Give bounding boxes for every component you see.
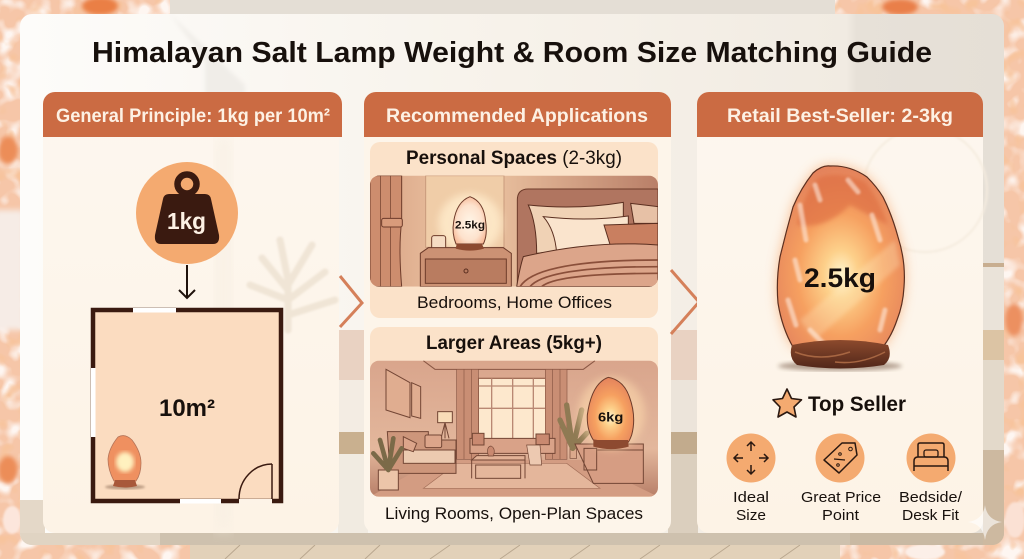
floor plan: 10 square metre room: [91, 308, 281, 504]
sofa and pillows: [339, 330, 364, 380]
icon: 1kg weight: 1kg: [167, 208, 206, 234]
feature: great price point: Point: [822, 507, 860, 524]
sparkle: [968, 505, 1002, 540]
title: Himalayan Salt Lamp Weight & Room Size Matching Guide: [92, 37, 932, 69]
caption: bedrooms, home offices: Bedrooms, Home Offices: [417, 293, 612, 312]
feature: bedside or desk fit: Desk Fit: [902, 507, 960, 524]
feature: ideal size: Size: [736, 507, 766, 524]
illustration: living room with lamp: 6kg: [598, 410, 623, 425]
illustration: bedroom with lamp: 2.5kg: [455, 220, 485, 232]
wood floor and rug: [339, 432, 364, 454]
label: 10m²: 10m²: [159, 395, 215, 422]
feature: ideal size: Ideal: [733, 489, 769, 506]
arrow: chevron to applications: [340, 276, 362, 327]
badge: top seller: [773, 389, 906, 417]
heading: personal spaces: Personal Spaces (2-3kg): [406, 148, 622, 169]
icon: 1kg weight: [136, 162, 238, 264]
arrow: weight to room: [179, 265, 195, 298]
header: retail best-seller: [697, 92, 983, 137]
label: 2.5kg: 2.5kg: [804, 263, 876, 293]
badge: top seller: Top Seller: [808, 393, 906, 416]
icon: small salt lamp: [105, 436, 145, 490]
illustration: bedroom with lamp: [370, 176, 658, 287]
panel: recommended applications: [364, 92, 671, 533]
feature: great price point: [801, 434, 881, 524]
header: general principle: [43, 92, 342, 137]
right side shelves: [983, 263, 1004, 267]
feature: great price point: Great Price: [801, 489, 881, 506]
header: retail best-seller: Retail Best-Seller: 2-3kg: [727, 106, 953, 127]
caption: living rooms, open-plan spaces: Living Rooms, Open-Plan Spaces: [385, 504, 643, 523]
card: personal spaces: [370, 142, 658, 318]
feature: bedside or desk fit: [899, 434, 963, 524]
feature: ideal size: [726, 434, 776, 524]
heading: larger areas: Larger Areas (5kg+): [426, 333, 602, 354]
illustration: living room with lamp: [370, 361, 658, 497]
panel: general principle: [43, 92, 342, 533]
card: larger areas: [370, 327, 658, 523]
illustration: large salt lamp: [777, 166, 904, 371]
header: general principle: General Principle: 1kg per 10m²: [56, 106, 330, 127]
feature: bedside or desk fit: Bedside/: [899, 489, 963, 506]
header: recommended applications: [364, 92, 671, 137]
arrow: chevron to best-seller: [671, 270, 699, 334]
header: recommended applications: Recommended Applications: [386, 106, 648, 127]
panel: retail best-seller: [697, 92, 987, 533]
